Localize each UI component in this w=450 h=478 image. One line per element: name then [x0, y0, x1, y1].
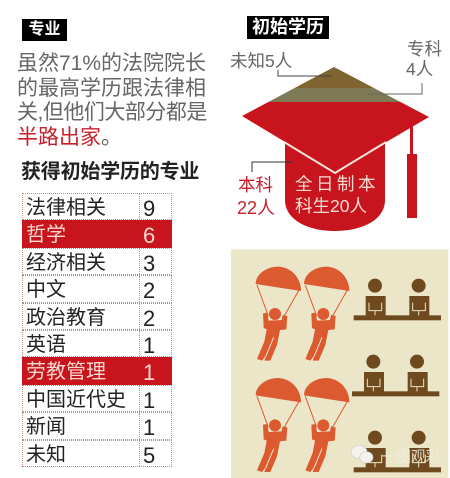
panel: paratroopers and desks: [231, 249, 448, 478]
heading: major: 专业: [28, 21, 60, 38]
cap body: full-time undergraduates: [285, 143, 385, 231]
table: majors of initial degree: 劳教管理: [26, 361, 106, 383]
label: unknown 5: 未知5人: [230, 51, 292, 71]
heading: initial degree: 初始学历: [252, 17, 324, 37]
icon: desk row 2: [352, 355, 439, 396]
table: majors of initial degree: 1: [143, 360, 155, 385]
text block: intro paragraph: [17, 52, 207, 149]
table: majors of initial degree: 1: [143, 388, 155, 413]
label: full-time 20: [295, 174, 379, 216]
icon: tassel: [407, 122, 417, 218]
table: majors of initial degree: 经济相关: [26, 252, 106, 274]
label: junior college 4: 4人: [406, 59, 433, 79]
label: bachelor 22: 本科: [238, 175, 273, 195]
watermark: 一图观彩: [382, 449, 441, 466]
leader line: unknown: [278, 70, 332, 76]
text block: intro paragraph: 半路出家。: [17, 126, 122, 149]
table: majors of initial degree: 新闻: [26, 416, 66, 438]
label: full-time 20: 科生20人: [295, 196, 367, 216]
text block: intro paragraph: 关,但他们大部分都是: [17, 101, 207, 124]
label: junior college 4: [406, 39, 442, 79]
icon: parachutist bottom right: [304, 378, 349, 472]
label: full-time 20: 全日制本: [295, 174, 379, 194]
table: majors of initial degree: [22, 193, 172, 468]
icon: parachutist bottom left: [256, 378, 301, 472]
table: majors of initial degree: 未知: [26, 444, 66, 466]
table: majors of initial degree: 9: [143, 196, 155, 221]
text block: intro paragraph: 虽然71%的法院院长: [17, 52, 206, 75]
table: majors of initial degree: 5: [143, 443, 155, 468]
table: majors of initial degree: 法律相关: [26, 197, 106, 219]
icon: parachutist top right: [304, 267, 349, 361]
table: majors of initial degree: 1: [143, 415, 155, 440]
label: bachelor 22: 22人: [237, 198, 275, 218]
chart: graduation cap: [230, 40, 442, 231]
label: bachelor 22: [237, 175, 275, 218]
table: majors of initial degree: 中国近代史: [26, 389, 126, 411]
leader line: junior college: [368, 83, 422, 94]
icon: desk row 3: [354, 431, 441, 472]
table: majors of initial degree: 政治教育: [26, 307, 106, 329]
table: majors of initial degree: 6: [143, 223, 155, 248]
watermark: [351, 445, 441, 466]
leader line: bachelor: [252, 162, 293, 172]
icon: parachutist top left: [256, 267, 301, 361]
table: majors of initial degree: 1: [143, 333, 155, 358]
icon: desk row 1: [354, 279, 441, 320]
table: majors of initial degree: 2: [143, 306, 155, 331]
heading: major: [22, 19, 67, 41]
table: majors of initial degree: 2: [143, 278, 155, 303]
table: majors of initial degree: 哲学: [26, 224, 66, 246]
table: majors of initial degree: 中文: [26, 279, 66, 301]
table: majors of initial degree: 3: [143, 251, 155, 276]
text block: intro paragraph: 的最高学历跟法律相: [17, 77, 206, 100]
cap top: degree proportions: [242, 67, 429, 143]
heading: table title: 获得初始学历的专业: [21, 161, 199, 183]
table: majors of initial degree: 英语: [26, 334, 66, 356]
